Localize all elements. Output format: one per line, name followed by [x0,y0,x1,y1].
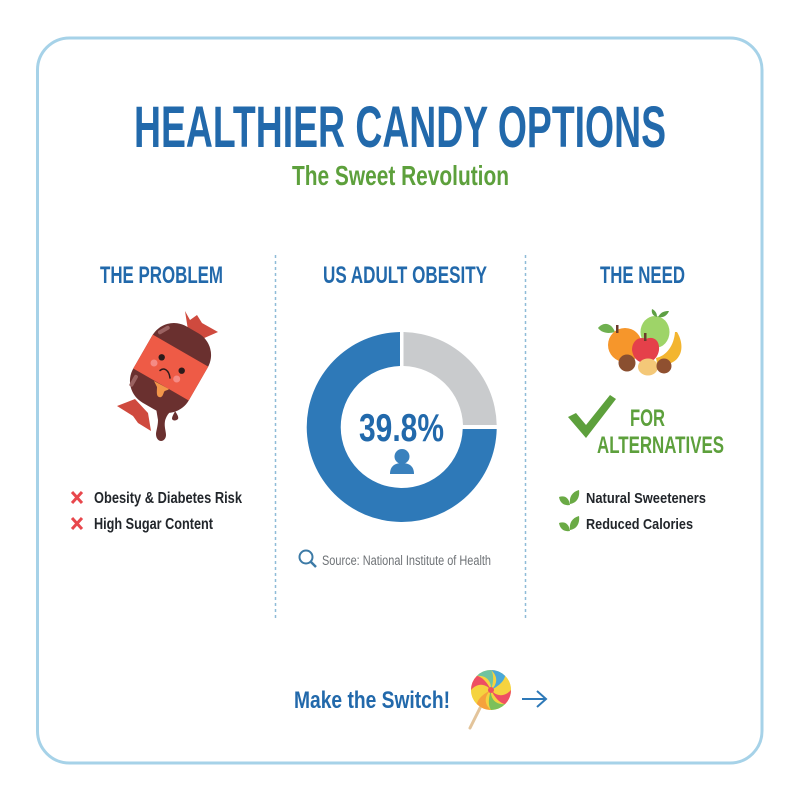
callout: for alternatives [597,405,724,459]
heading: the problem: THE PROBLEM [100,262,223,289]
heading: the need: THE NEED [600,262,685,289]
icon: person [390,449,414,474]
donut chart [307,332,497,522]
list item: reduced calories [559,516,693,533]
call to action [294,666,546,728]
icon: green check mark [568,395,616,438]
list item: natural sweeteners: Natural Sweeteners [586,490,706,507]
arrow [522,691,546,707]
list item: high sugar content: High Sugar Content [94,516,213,533]
callout: for alternatives: FOR [630,405,665,432]
subtitle: The Sweet Revolution [292,160,509,191]
donut value: 39.8% [359,407,444,450]
icon: sad chocolate candy [117,311,220,441]
list item: obesity and diabetes risk: Obesity & Diabetes Risk [94,490,242,507]
callout: for alternatives: ALTERNATIVES [597,432,724,459]
source note: Source: National Institute of Health [322,553,491,568]
icon: fruit and nuts [598,309,681,376]
source note [300,550,491,568]
panel: the problem [72,262,242,533]
list item: reduced calories: Reduced Calories [586,516,693,533]
text: make the switch: Make the Switch! [294,687,450,714]
heading: us adult obesity: US ADULT OBESITY [323,262,487,289]
icon: lollipop [467,666,515,728]
panel: us adult obesity [300,262,497,568]
panel: the need [559,262,724,533]
